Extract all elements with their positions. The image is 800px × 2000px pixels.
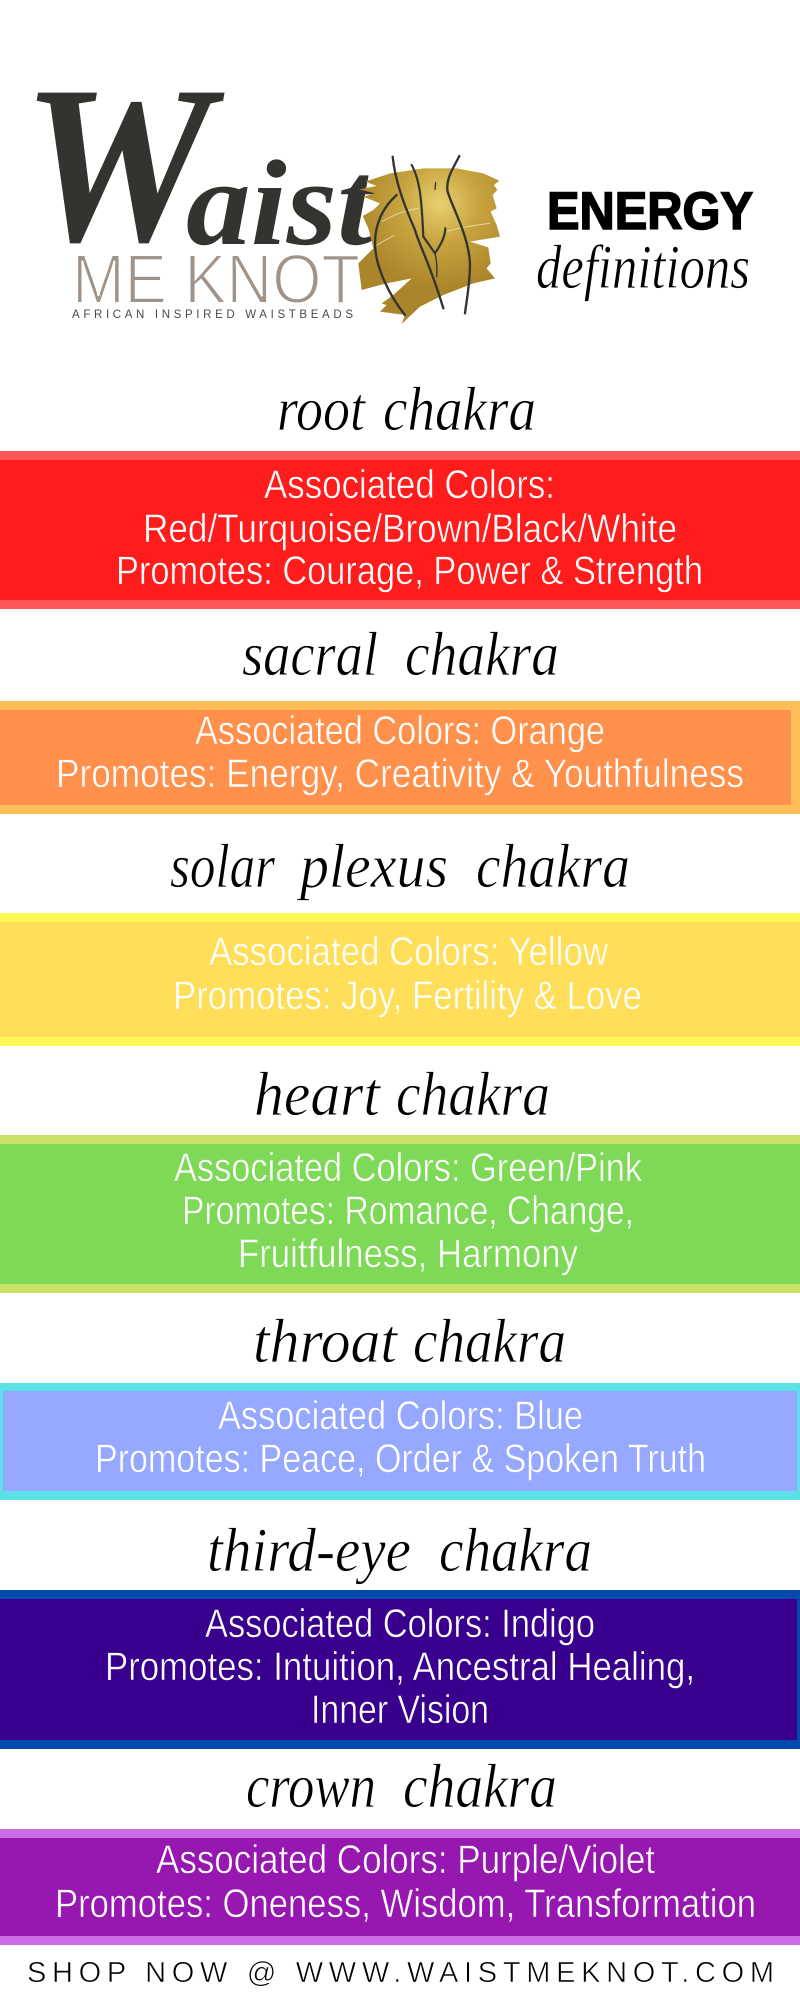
heading: throat chakra: chakra <box>413 1308 566 1376</box>
band: heart chakra <box>0 1135 800 1293</box>
text: heart chakra details: Fruitfulness, Harmony <box>238 1232 578 1276</box>
text: third-eye chakra details: Inner Vision <box>311 1688 489 1732</box>
panel: throat chakra <box>0 1308 800 1500</box>
band: root chakra <box>0 451 800 609</box>
logo wordmark: Waist: W <box>22 39 225 289</box>
heading: crown chakra: chakra <box>403 1753 557 1821</box>
text: solar plexus chakra details <box>173 930 642 1018</box>
logo wordmark: Me Knot: ME KNOT <box>72 240 360 318</box>
text: root chakra details: Promotes: Courage, Power & Strength <box>116 549 703 593</box>
title: Energy definitions <box>536 182 753 302</box>
text: heart chakra details <box>174 1146 643 1276</box>
heading: root chakra: chakra <box>383 376 536 444</box>
heading: root chakra: root <box>277 376 367 444</box>
panel: third-eye chakra <box>0 1517 800 1749</box>
heading: throat chakra: throat <box>253 1308 399 1376</box>
panel: solar plexus chakra <box>0 833 800 1046</box>
icon: gold brush with body outline <box>358 156 500 324</box>
title word: ENERGY: ENERGY <box>547 182 753 241</box>
text: heart chakra details: Promotes: Romance, Change, <box>182 1189 634 1233</box>
text: solar plexus chakra details: Promotes: Joy, Fertility & Love <box>173 974 642 1018</box>
heading: heart chakra: heart <box>254 1061 382 1129</box>
logo wordmark: Waist: aist <box>186 136 376 271</box>
text: crown chakra details: Associated Colors: Purple/Violet <box>156 1838 655 1882</box>
text: sacral chakra details: Associated Colors: Orange <box>195 709 605 753</box>
heading: heart chakra: chakra <box>396 1061 550 1129</box>
text: sacral chakra details <box>56 709 744 796</box>
band: third-eye chakra <box>0 1590 800 1749</box>
logo: Waist Me Knot <box>22 39 500 324</box>
text: throat chakra details <box>95 1394 706 1481</box>
footer: shop now call to action: SHOP NOW @ WWW.WAISTMEKNOT.COM <box>27 1957 774 1989</box>
title word: definitions: definitions <box>536 234 750 302</box>
heading: solar plexus chakra: chakra <box>476 833 630 901</box>
heading: third-eye chakra: chakra <box>439 1517 592 1585</box>
heading: solar plexus chakra <box>170 833 630 901</box>
text: root chakra details <box>116 463 703 593</box>
band: throat chakra <box>0 1383 800 1500</box>
heading: root chakra <box>277 376 536 444</box>
heading: sacral chakra: chakra <box>405 621 559 689</box>
text: root chakra details: Associated Colors: <box>264 463 555 507</box>
panel: root chakra <box>0 376 800 609</box>
heading: throat chakra <box>253 1308 566 1376</box>
panel: crown chakra <box>0 1753 800 1945</box>
logo wordmark: Waist <box>22 39 376 289</box>
heading: heart chakra <box>254 1061 550 1129</box>
text: root chakra details: Red/Turquoise/Brown/Black/White <box>143 507 677 551</box>
heading: solar plexus chakra: plexus <box>296 833 448 901</box>
heading: third-eye chakra <box>207 1517 592 1585</box>
heading: solar plexus chakra: solar <box>170 833 276 901</box>
band: crown chakra <box>0 1829 800 1945</box>
heading: sacral chakra <box>242 621 559 689</box>
panel: heart chakra <box>0 1061 800 1293</box>
panel: sacral chakra <box>0 621 800 814</box>
logo tagline: AFRICAN INSPIRED WAISTBEADS <box>72 309 353 321</box>
band: sacral chakra <box>0 701 800 814</box>
heading: third-eye chakra: third-eye <box>207 1517 411 1585</box>
text: third-eye chakra details: Promotes: Intuition, Ancestral Healing, <box>105 1645 695 1689</box>
text: throat chakra details: Promotes: Peace, Order & Spoken Truth <box>95 1437 706 1481</box>
text: third-eye chakra details <box>105 1602 695 1732</box>
text: third-eye chakra details: Associated Colors: Indigo <box>205 1602 595 1646</box>
text: crown chakra details <box>55 1838 756 1926</box>
heading: crown chakra <box>246 1753 557 1821</box>
text: solar plexus chakra details: Associated Colors: Yellow <box>209 930 608 974</box>
heading: sacral chakra: sacral <box>242 621 378 689</box>
heading: crown chakra: crown <box>246 1753 376 1821</box>
text: heart chakra details: Associated Colors: Green/Pink <box>174 1146 643 1190</box>
text: throat chakra details: Associated Colors: Blue <box>218 1394 583 1438</box>
band: solar plexus chakra <box>0 913 800 1046</box>
